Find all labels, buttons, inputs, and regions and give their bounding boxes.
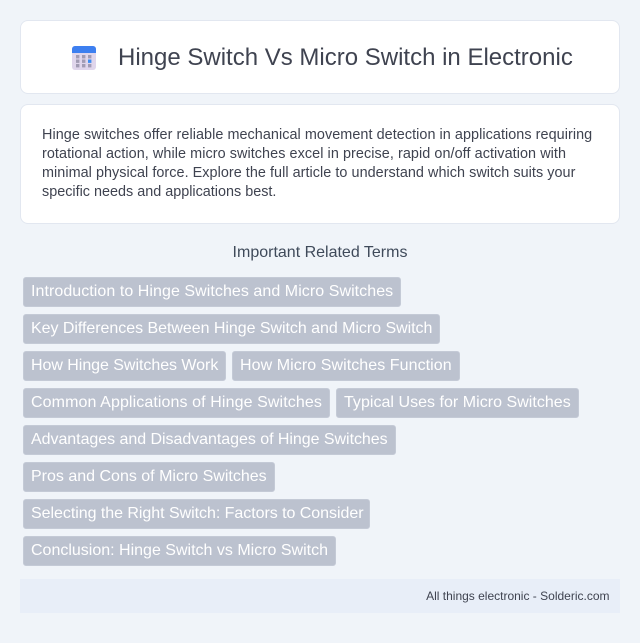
text block: summary: rotational action, while micro switches excel in precise, rapid on/off activation with [42,146,566,162]
title: Hinge Switch Vs Micro Switch in Electronic [118,44,573,71]
panel: summary text [20,104,620,224]
text block: summary: Hinge switches offer reliable mechanical movement detection in applications requiring [42,127,592,143]
tag: Introduction to Hinge Switches and Micro Switches [31,283,393,300]
tag [23,499,370,529]
footer bar [20,579,620,613]
text block: summary: specific needs and applications best. [42,184,276,200]
tag list [23,277,579,566]
tag: Typical Uses for Micro Switches [344,394,571,411]
tag [23,462,275,492]
tag: Pros and Cons of Micro Switches [31,468,267,485]
icon: calendar grid [72,46,96,70]
text block: summary [42,127,592,200]
tag: Common Applications of Hinge Switches [31,394,322,411]
tag [23,388,330,418]
tag [23,425,396,455]
tag [23,277,401,307]
panel: title header [20,20,620,94]
tag [23,314,440,344]
tag [336,388,579,418]
tag [23,536,336,566]
tag: Advantages and Disadvantages of Hinge Switches [31,431,388,448]
text block: summary: minimal physical force. Explore the full article to understand which switch suits your [42,165,575,181]
tag: How Micro Switches Function [240,357,452,374]
tag: Conclusion: Hinge Switch vs Micro Switch [31,542,328,559]
footer text: All things electronic - Solderic.com [426,589,610,603]
tag [23,351,226,381]
tag: How Hinge Switches Work [31,357,218,374]
tag: Selecting the Right Switch: Factors to Consider [31,505,364,522]
tag [232,351,460,381]
tag: Key Differences Between Hinge Switch and Micro Switch [31,320,432,337]
heading: important related terms: Important Related Terms [233,244,407,261]
